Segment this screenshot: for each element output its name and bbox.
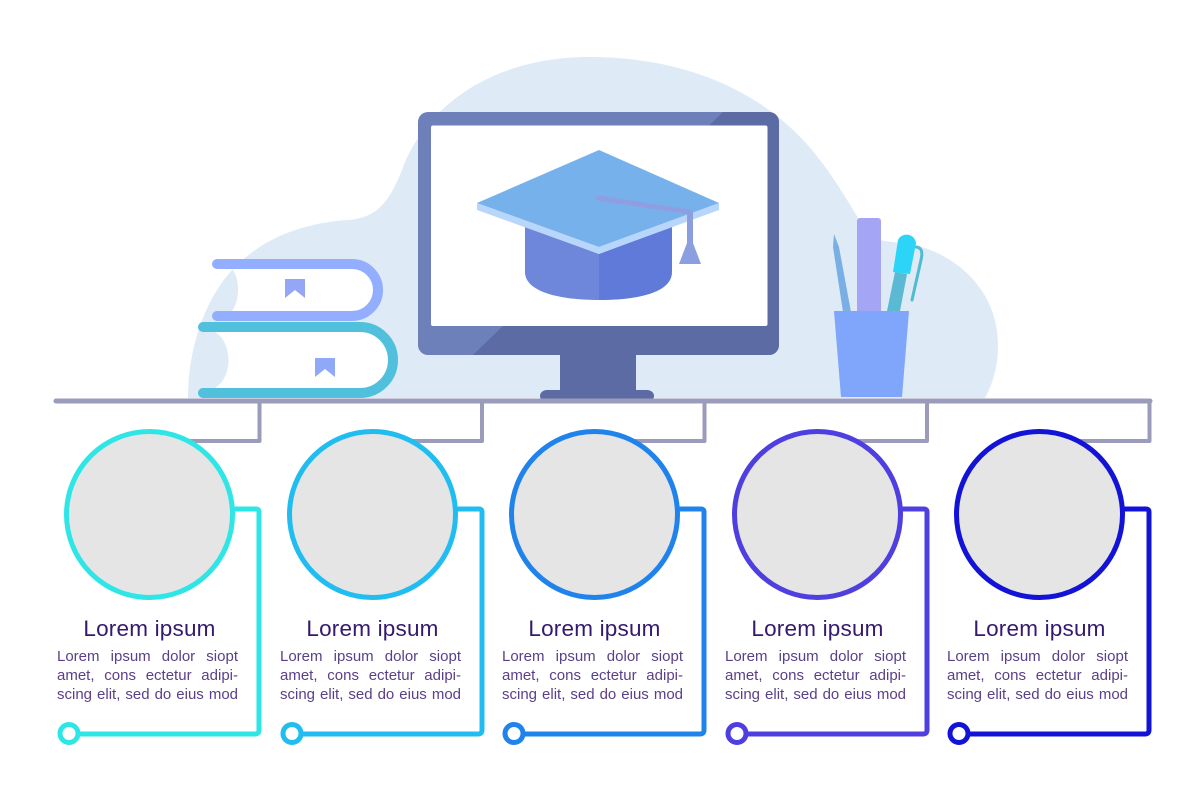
shelf line with drop connectors — [56, 401, 1150, 441]
body text 3: amet, cons ectetur adipi- — [502, 667, 683, 684]
panel: item 5 — [947, 429, 1152, 745]
body text 1: Lorem ipsum dolor siopt — [57, 648, 238, 665]
body text 2: Lorem ipsum dolor siopt — [280, 648, 461, 665]
circle and connector 1 — [58, 429, 262, 745]
panel: item 2 — [280, 429, 484, 745]
heading 3: Lorem ipsum — [528, 616, 661, 641]
background cloud shape — [188, 57, 998, 398]
body text 3: scing elit, sed do eius mod — [502, 686, 683, 703]
icon: stack of books — [203, 264, 393, 393]
body text 1 — [57, 648, 238, 703]
body text 4: scing elit, sed do eius mod — [725, 686, 906, 703]
heading 2: Lorem ipsum — [306, 616, 439, 641]
panel: item 3 — [502, 429, 706, 745]
body text 4: Lorem ipsum dolor siopt — [725, 648, 906, 665]
heading 4: Lorem ipsum — [751, 616, 884, 641]
body text 3 — [502, 648, 683, 703]
circle and connector 3 — [502, 429, 706, 745]
body text 2 — [280, 648, 461, 703]
body text 4 — [725, 648, 906, 703]
body text 5: scing elit, sed do eius mod — [947, 686, 1128, 703]
panel: item 1 — [57, 429, 262, 745]
icon: computer monitor with graduation cap — [418, 112, 779, 402]
body text 3: Lorem ipsum dolor siopt — [502, 648, 683, 665]
circle and connector 2 — [280, 429, 484, 745]
body text 1: scing elit, sed do eius mod — [57, 686, 238, 703]
heading 5: Lorem ipsum — [973, 616, 1106, 641]
body text 5 — [947, 648, 1128, 703]
body text 2: scing elit, sed do eius mod — [280, 686, 461, 703]
icon: pen holder — [833, 218, 922, 397]
panel: item 4 — [725, 429, 930, 745]
body text 5: Lorem ipsum dolor siopt — [947, 648, 1128, 665]
body text 1: amet, cons ectetur adipi- — [57, 667, 238, 684]
body text 4: amet, cons ectetur adipi- — [725, 667, 906, 684]
circle and connector 5 — [948, 429, 1152, 745]
heading 1: Lorem ipsum — [83, 616, 216, 641]
circle and connector 4 — [726, 429, 930, 745]
body text 5: amet, cons ectetur adipi- — [947, 667, 1128, 684]
body text 2: amet, cons ectetur adipi- — [280, 667, 461, 684]
